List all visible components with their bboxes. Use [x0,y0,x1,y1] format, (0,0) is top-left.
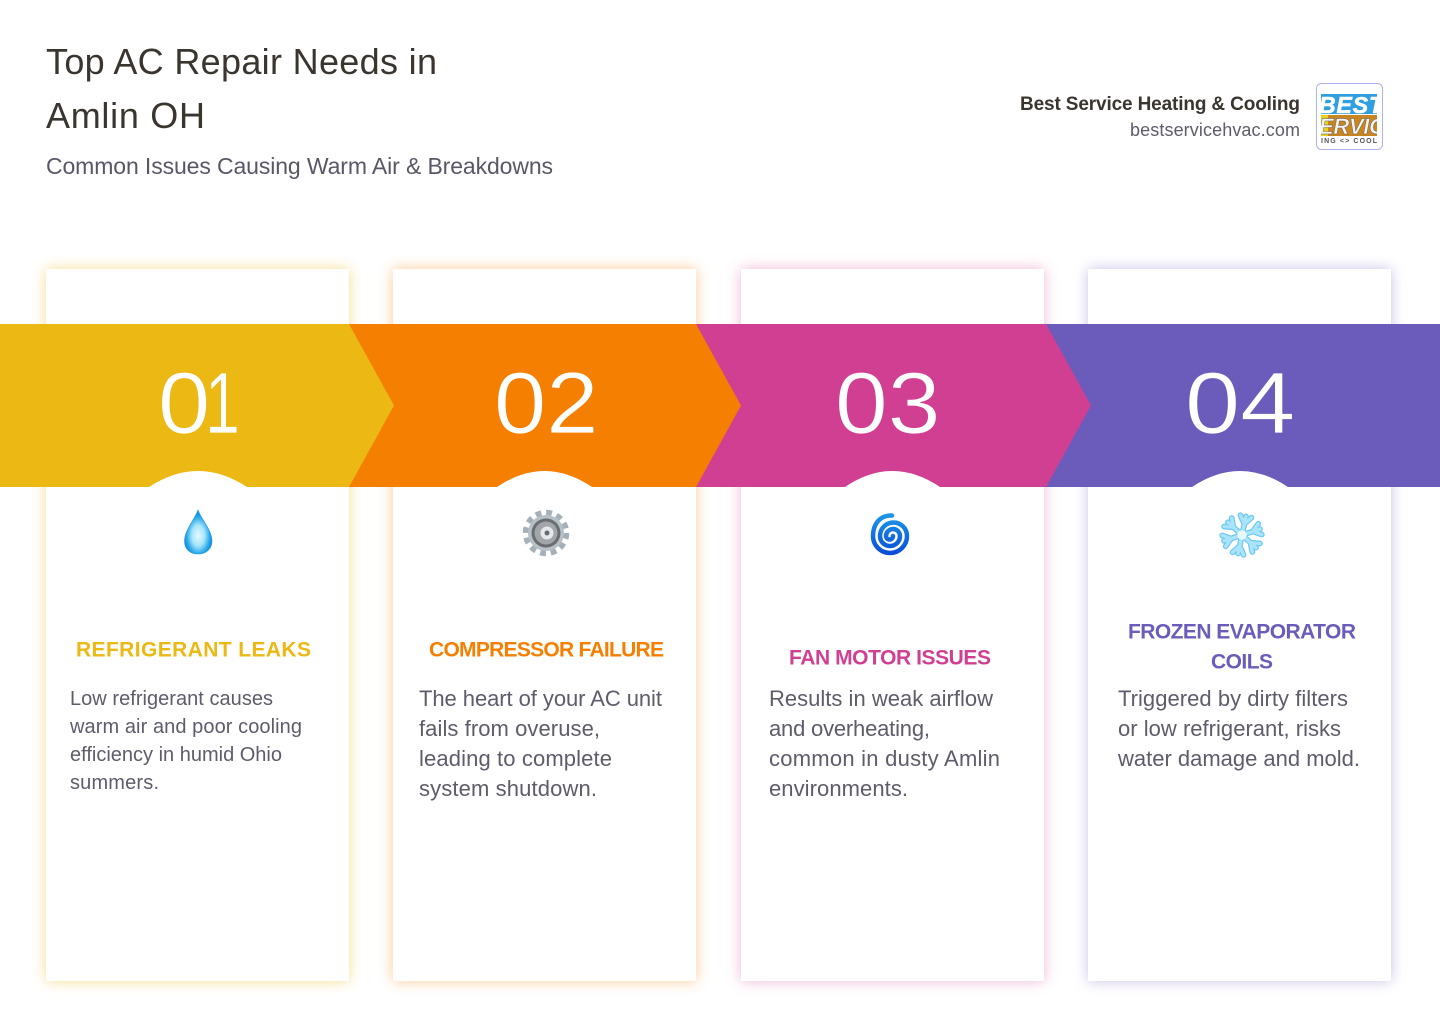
icon: water drop [184,510,212,554]
notch 02 [497,471,592,487]
body text: Triggered by dirty filters [1118,686,1348,711]
heading: FROZEN EVAPORATOR [1128,620,1356,644]
body text: environments. [769,776,908,801]
number 01: 0 [158,355,210,452]
body text: efficiency in humid Ohio [70,744,282,766]
logo: BEST [1319,92,1385,118]
brand block [1020,84,1386,150]
number 02: 02 [494,355,598,452]
title: Amlin OH [46,95,205,136]
number 01: 1 [205,355,240,453]
body text [769,686,1000,801]
logo: ERVIC [1319,114,1386,139]
heading: COMPRESSOR FAILURE [429,638,664,662]
heading: REFRIGERANT LEAKS [76,638,311,662]
icon: gear [526,514,566,552]
number 04: 04 [1185,355,1295,452]
icon: snowflake [1219,512,1265,558]
title [46,41,437,136]
arrow banner 03 [696,324,1091,487]
header: title block [46,41,553,179]
body text [69,688,302,794]
body text: summers. [70,772,159,794]
notch 04 [1192,471,1288,487]
number 03: 03 [835,356,940,452]
body text: and overheating, [769,716,930,741]
body text: Results in weak airflow [769,686,993,711]
logo: ING <> COOL [1321,138,1378,145]
panel: fan motor issues [741,269,1044,981]
heading [1128,620,1356,674]
notch 03 [845,471,940,487]
body text [1117,686,1360,771]
heading: FAN MOTOR ISSUES [789,646,991,670]
number 01 [158,355,240,453]
icon: spiral [873,515,907,553]
arrow banner 02 [349,324,741,487]
body text: or low refrigerant, risks [1118,716,1341,741]
body text: warm air and poor cooling [69,716,302,738]
website: bestservicehvac.com [1130,120,1300,140]
title: Top AC Repair Needs in [46,41,437,82]
body text: water damage and mold. [1117,746,1360,771]
panel: frozen evaporator coils [1088,269,1391,981]
company name: Best Service Heating & Cooling [1020,94,1300,115]
body text: fails from overuse, [419,716,600,741]
notch 01 [149,471,247,487]
panel: refrigerant leaks [46,269,349,981]
body text: Low refrigerant causes [70,688,273,710]
logo [1316,84,1386,150]
body text [419,686,662,801]
arrow banner 01 [0,324,394,487]
heading: COILS [1211,650,1273,674]
body text: leading to complete [419,746,612,771]
arrow banner 04 [1046,324,1440,487]
body text: system shutdown. [419,776,597,801]
subtitle: Common Issues Causing Warm Air & Breakdowns [46,153,553,179]
body text: The heart of your AC unit [419,686,662,711]
panel: compressor failure [393,269,696,981]
body text: common in dusty Amlin [769,746,1000,771]
